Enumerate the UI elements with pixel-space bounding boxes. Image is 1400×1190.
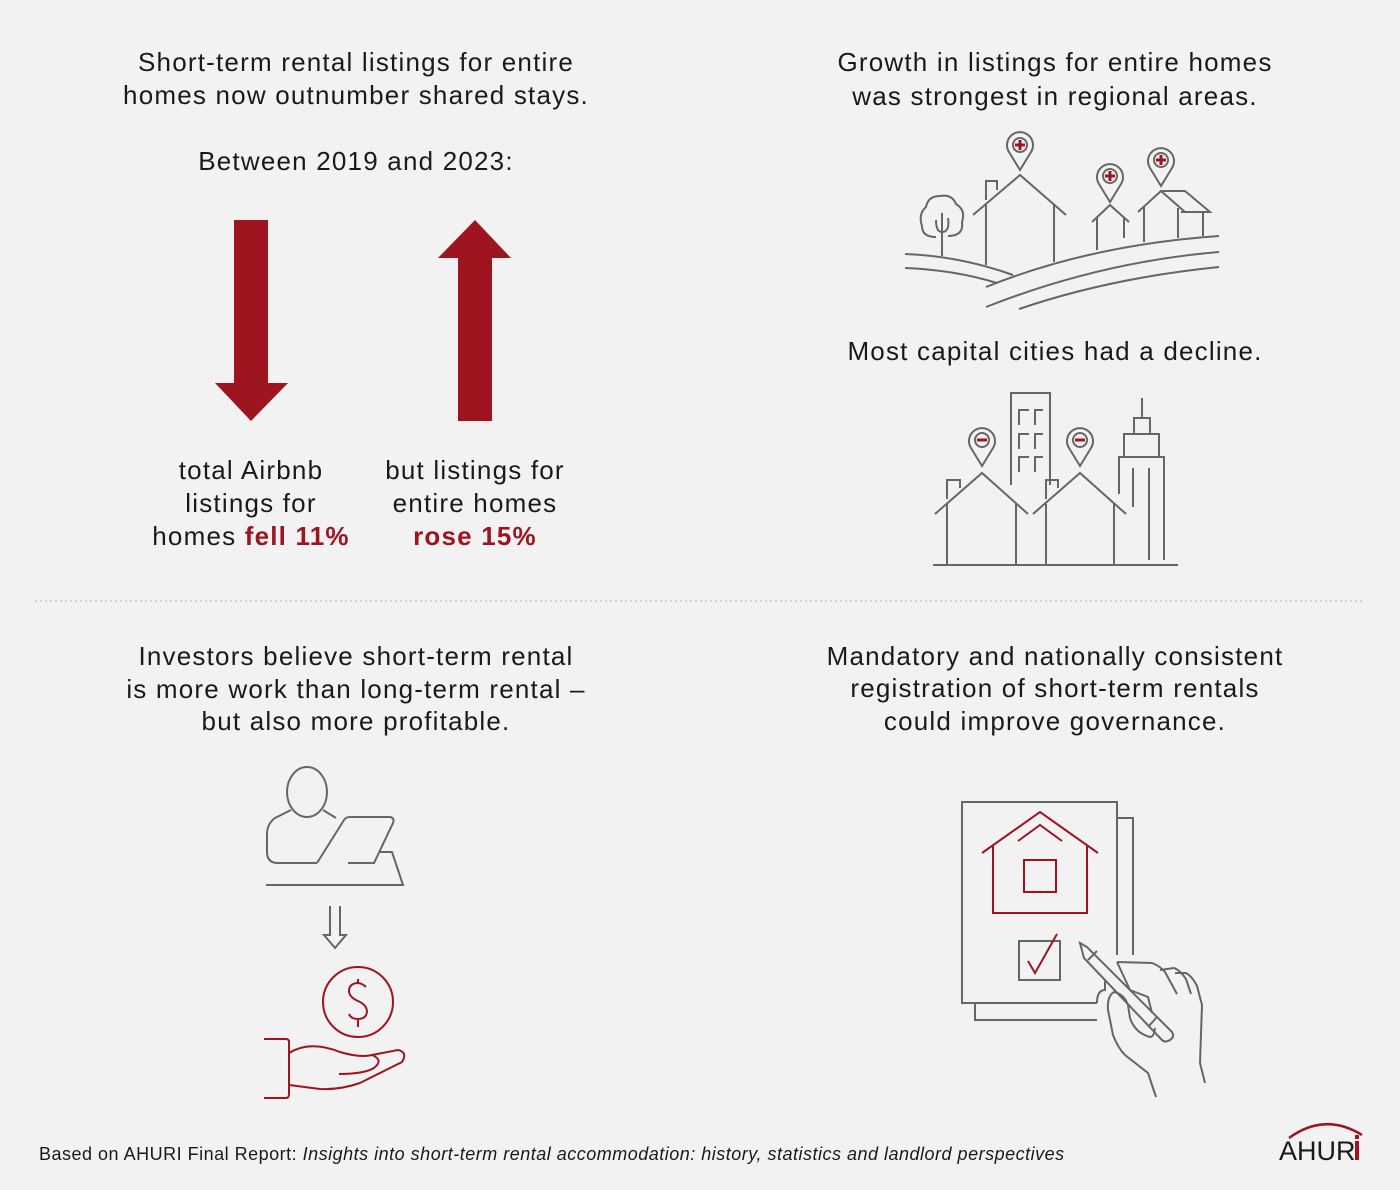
text: fell 11%: listings for bbox=[185, 488, 317, 518]
text: rose 15%: entire homes bbox=[393, 488, 557, 518]
title: entire homes outnumber bbox=[123, 47, 589, 110]
text: fell 11%: homes fell 11% bbox=[152, 521, 350, 551]
illustration: city bbox=[933, 393, 1178, 565]
icon: up arrow bbox=[438, 220, 511, 421]
heading: regional growth bbox=[837, 47, 1273, 111]
heading: regional growth: Growth in listings for entire homes bbox=[837, 47, 1273, 77]
logo: AHURI bbox=[1279, 1124, 1362, 1166]
heading: registration: Mandatory and nationally consistent bbox=[827, 641, 1283, 671]
heading: registration: could improve governance. bbox=[884, 706, 1226, 736]
heading: registration bbox=[827, 641, 1283, 736]
heading: investors bbox=[126, 641, 586, 736]
title: entire homes outnumber: Short-term rental listings for entire bbox=[138, 47, 574, 77]
icon: arrow down bbox=[324, 906, 346, 948]
subheading: between 2019 and 2023: Between 2019 and 2023: bbox=[198, 146, 514, 176]
heading: investors: Investors believe short-term rental bbox=[138, 641, 574, 671]
title: entire homes outnumber: homes now outnumber shared stays. bbox=[123, 80, 589, 110]
icon: plus pins bbox=[1007, 132, 1174, 202]
icon: person at laptop bbox=[266, 767, 403, 885]
heading: investors: is more work than long-term rental – bbox=[126, 674, 586, 704]
heading: investors: but also more profitable. bbox=[202, 706, 510, 736]
heading: regional growth: was strongest in regional areas. bbox=[851, 81, 1258, 111]
logo: AHURI: AHUR bbox=[1279, 1136, 1356, 1166]
footer: source: Based on AHURI Final Report: Insights into short-term rental accommodation: history, statistics and landlord perspectives bbox=[39, 1144, 1065, 1164]
illustration: regional houses bbox=[905, 175, 1219, 309]
icon: hand with coin bbox=[264, 967, 404, 1098]
icon: minus pins bbox=[977, 438, 1085, 442]
text: fell 11% bbox=[152, 455, 350, 551]
icon: down arrow bbox=[215, 220, 288, 421]
icon: document with hand bbox=[962, 802, 1205, 1097]
heading: capital cities decline: Most capital cities had a decline. bbox=[847, 336, 1263, 366]
text: rose 15% bbox=[385, 455, 565, 551]
text: rose 15%: but listings for bbox=[385, 455, 565, 485]
text: fell 11%: total Airbnb bbox=[179, 455, 323, 485]
divider bbox=[35, 600, 1365, 602]
heading: registration: registration of short-term rentals bbox=[850, 673, 1260, 703]
text: rose 15%: rose 15% bbox=[413, 521, 537, 551]
